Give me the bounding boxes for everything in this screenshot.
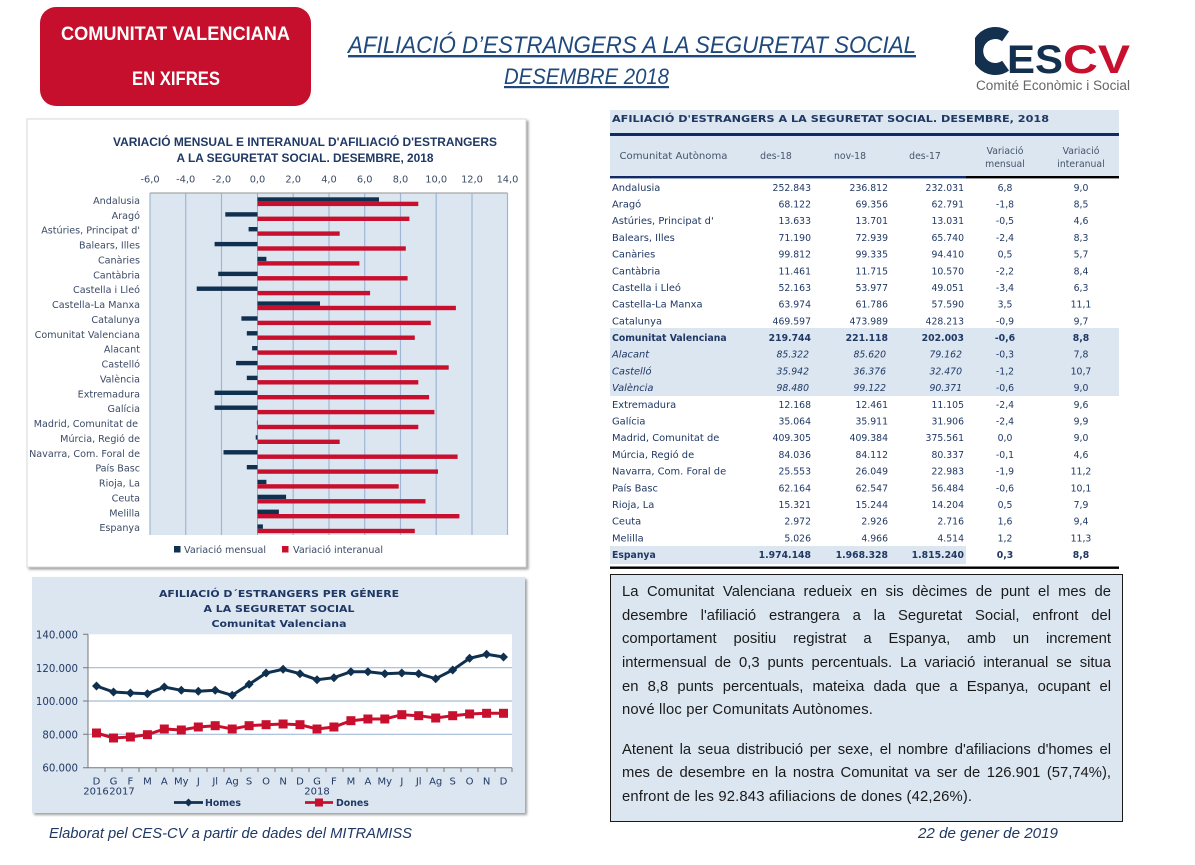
bar chart category labels: Andalusia [93,196,140,207]
table rows: -2,4 [996,400,1014,411]
table rows: 9,6 [1074,400,1088,411]
table rows: 1,6 [998,517,1012,528]
table column headers: Comunitat Autònoma [620,150,728,162]
bar chart category labels: Castella-La Manxa [52,300,140,311]
table rows: 1,2 [998,533,1012,544]
line chart x axis labels: My [174,776,189,788]
table rows: 15.244 [855,500,888,511]
table rows: 35.911 [855,416,888,428]
bar chart x axis labels: 6,0 [357,174,372,186]
table rows: 6,8 [998,183,1012,194]
table rows: 35.064 [778,416,811,428]
table rows: 2.926 [861,517,888,528]
bar chart heading: VARIACIÓ MENSUAL E INTERANUAL D'AFILIACIÓ D'ESTRANGERS [113,134,497,149]
bar chart category labels: Extremadura [78,389,140,400]
table rows: 61.786 [855,300,888,311]
table rows: 8,8 [1073,333,1089,344]
table column headers: Variació [1063,146,1100,157]
line chart x axis labels: F [331,776,337,788]
table rows: -2,2 [996,266,1014,277]
table rows: 11.461 [778,266,811,277]
table rows: -1,2 [996,366,1014,377]
table rows: -0,6 [996,383,1014,394]
line chart x axis labels: Jl [415,776,422,788]
table rows: 26.049 [855,467,888,478]
table rows: 57.590 [931,300,964,311]
bars: variació mensual [197,197,379,529]
table rows: 9,4 [1074,517,1088,528]
bar chart x axis labels: 10,0 [425,174,447,186]
table rows: 99.122 [853,383,886,394]
bar chart x axis labels: 14,0 [497,174,518,186]
table rows: 10,1 [1071,483,1091,494]
table rows: Alacant [611,350,650,361]
bar chart category labels: Alacant [104,345,140,356]
table rows: 11.105 [931,400,964,411]
table rows: 9,9 [1074,416,1088,428]
table rows: 9,7 [1074,316,1088,327]
line chart x axis labels: G [110,776,117,788]
bar chart category labels: Ceuta [112,493,140,504]
table rows: Extremadura [612,400,676,411]
line chart x axis labels: N [279,776,287,788]
table rows: 49.051 [931,283,964,294]
table rows: 68.122 [778,200,811,210]
line chart y axis labels: 140.000 [36,630,78,642]
table rows: 1.968.328 [836,550,888,561]
line chart y axis labels [36,630,78,774]
table rows: Castella i Lleó [612,282,681,294]
table rows: Canàries [612,249,655,261]
table rows: 1.815.240 [912,550,965,561]
table rows: 63.974 [778,300,811,311]
table rows: Catalunya [612,316,662,327]
line chart x axis labels: 2016 [83,786,109,798]
table rows: -1,9 [996,467,1014,478]
badge: Comunitat Valenciana en xifres: EN XIFRES [132,69,220,90]
bar chart category labels: Cantàbria [93,269,140,281]
table rows: 65.740 [931,233,964,244]
bar chart category labels: Castelló [102,359,140,371]
table rows: Múrcia, Regió de [612,449,694,461]
table rows: 90.371 [929,383,962,394]
table title band [610,110,1119,136]
line chart legend: Dones [336,798,369,809]
table rows: -2,4 [996,233,1014,244]
table rows: 84.112 [855,450,888,461]
table rows: 221.118 [846,333,888,344]
table rows: Castella-La Manxa [612,300,703,311]
table rows: 469.597 [773,316,811,327]
bar chart heading [113,134,497,165]
table rows: 11.715 [855,266,888,277]
table rows: 10,7 [1071,366,1091,377]
table rows: 236.812 [850,183,888,194]
table rows: 71.190 [778,233,811,244]
table rows: 35.942 [776,366,809,377]
table rows: 80.337 [931,450,964,461]
logo: CES CV: ES [1007,38,1063,82]
table rows: 62.164 [778,483,811,494]
table rows: 99.812 [778,250,811,261]
table rows: -0,6 [996,483,1014,494]
table rows: 56.484 [931,483,964,494]
table rows: 10.570 [931,266,964,277]
table rows: 0,0 [998,433,1012,444]
bar chart legend: Variació mensual [184,544,266,556]
table rows: 22.983 [931,467,964,478]
table rows: 8,4 [1074,266,1088,277]
bar chart heading: A LA SEGURETAT SOCIAL. DESEMBRE, 2018 [176,151,434,165]
table rows: Espanya [612,550,656,561]
table rows: Comunitat Valenciana [612,333,727,344]
line chart x axis labels: A [364,776,371,788]
bar chart category labels: Melilla [109,508,140,519]
text panel: commentary: nové lloc per Comunitats Autònomes. [622,702,873,718]
table rows: 0,5 [998,500,1012,511]
table rows: 2.972 [784,517,811,528]
table rows: 13.633 [778,216,811,227]
table rows: -1,8 [996,200,1014,210]
panel: data table [610,110,1119,569]
table rows: 94.410 [931,250,964,261]
bar chart category labels: Galícia [108,403,140,415]
line chart x axis labels: S [450,776,456,788]
footer: date: 22 de gener de 2019 [917,825,1059,842]
panel: line chart by gender [32,577,525,813]
table rows: 7,9 [1074,500,1088,511]
table rows: 6,3 [1074,283,1088,294]
line chart x axis labels: Ag [226,776,239,788]
table column headers: Variació [987,146,1024,157]
table rows: 232.031 [926,183,964,194]
table rows: 4.514 [937,533,964,544]
table rows: 11,1 [1071,300,1091,311]
table rows: 12.461 [855,400,888,411]
line chart heading: AFILIACIÓ D´ESTRANGERS PER GÉNERE [159,587,399,600]
text panel: commentary: desembre l'afiliació estrangera a la Seguretat Social, enfront del [622,608,1111,624]
table column headers: nov-18 [834,151,866,162]
table rows: -0,1 [996,450,1014,461]
table rows: 0,5 [998,250,1012,261]
table rows: 69.356 [855,200,888,210]
bar chart category labels: Astúries, Principat d' [41,225,140,237]
table rows: 3,5 [998,300,1012,311]
table rows: Cantàbria [612,265,660,277]
line chart legend: Homes [205,798,241,809]
table rows: Castelló [612,365,652,377]
bar chart plot area [150,193,508,535]
table rows: 62.547 [855,483,888,494]
table rows: 5.026 [784,533,811,544]
bar chart category labels: Aragó [112,210,140,222]
bar chart x axis labels [140,174,518,186]
table rows: 0,3 [997,550,1013,561]
table rows: 85.620 [853,350,886,361]
table rows: 85.322 [776,350,809,361]
bar chart category labels: Navarra, Com. Foral de [29,449,140,460]
table rows: Madrid, Comunitat de [612,433,719,444]
table rows [611,183,1091,561]
line chart x axis labels: M [143,776,152,788]
table rows: Ceuta [612,517,641,528]
bar chart x axis labels: 8,0 [393,174,408,186]
bar chart x axis labels: -6,0 [140,174,160,186]
title: AFILIACIÓ D’ESTRANGERS A LA SEGURETAT SOCIAL [346,32,916,59]
table rows: 252.843 [773,183,811,194]
table rows: Balears, Illes [612,233,675,244]
line chart x axis labels: A [161,776,168,788]
line chart x axis labels: 2017 [109,786,135,798]
text panel: commentary: La Comunitat Valenciana redueix en sis dècimes de punt el mes de [622,584,1111,600]
table rows: -0,5 [996,216,1014,227]
bar chart category labels: Catalunya [91,315,140,326]
text panel: commentary: en 8,8 punts percentuals, mateixa dada que a Espanya, ocupant el [622,679,1111,695]
bar chart category labels [29,196,140,534]
table rows: 98.480 [776,383,809,394]
table rows: Aragó [612,198,641,210]
table rows: 5,7 [1074,250,1088,261]
table rows: 31.906 [931,416,964,428]
table rows: 99.335 [855,250,888,261]
bar chart x axis labels: -4,0 [176,174,195,186]
text panel: commentary: enfront de les 92.843 afiliacions de dones (42,26%). [622,789,972,805]
table rows: 409.384 [850,433,888,444]
table rows: 13.701 [855,216,888,227]
line chart x axis labels: Jl [211,776,218,788]
line chart y axis labels: 120.000 [36,664,78,675]
table highlight bands [610,328,1119,564]
line chart x axis labels: Ag [429,776,442,788]
footer: source note: Elaborat pel CES-CV a partir de dades del MITRAMISS [49,825,412,842]
line chart x axis labels: D [296,776,304,788]
logo: CES CV: Comité Econòmic i Social [976,78,1130,93]
bar chart category labels: Balears, Illes [79,241,140,252]
line chart x axis labels: G [313,776,321,788]
table rows: 15.321 [778,500,811,511]
bar chart x axis labels: 2,0 [285,174,301,186]
line chart heading [159,587,399,630]
table rows: Navarra, Com. Foral de [612,467,726,478]
bar chart category labels: País Basc [95,463,140,475]
table rows: 409.305 [773,433,811,444]
table rows: 428.213 [926,316,964,327]
table rows: 4,6 [1074,216,1088,227]
line chart y axis labels: 60.000 [42,764,78,774]
bar chart x axis labels: 4,0 [321,174,337,186]
table rows: 14.204 [931,500,964,511]
table rows: Andalusia [612,183,660,194]
table rows: 62.791 [931,200,964,210]
table rows: 84.036 [778,450,811,461]
table rows: País Basc [612,482,658,494]
line chart x axis labels [83,776,508,798]
table rows: 9,0 [1074,433,1088,444]
line chart heading: A LA SEGURETAT SOCIAL [204,604,354,615]
bar chart category labels: València [100,373,140,385]
bar chart category labels: Castella i Lleó [73,284,140,296]
bar chart category labels: Comunitat Valenciana [35,330,140,341]
line series: Homes [92,650,508,700]
bar chart x axis labels: 0,0 [250,174,265,186]
table column headers: des-18 [760,151,792,162]
logo: CES CV: CV [1063,38,1130,82]
table rows: -3,4 [996,283,1014,294]
line chart legend [174,798,369,809]
table rows: 79.162 [929,350,962,361]
bar chart category labels: Canàries [98,254,140,266]
table rows: 473.989 [850,316,888,327]
table rows: 25.553 [778,467,811,478]
table rows: 4,6 [1074,450,1088,461]
panel: bar chart of monthly and annual variation [27,119,526,567]
bar chart category labels: Espanya [99,523,140,534]
line chart heading: Comunitat Valenciana [212,619,346,630]
table rows: 8,5 [1074,200,1088,210]
table rows: 36.376 [853,366,886,377]
table rows: -0,3 [996,350,1014,361]
table rows: Galícia [612,416,645,428]
table rows: València [612,382,653,394]
text panel: commentary: intermensual de 0,3 punts percentuals. La variació interanual se situa [622,655,1111,671]
table rows: 9,0 [1074,383,1088,394]
table rows: 1.974.148 [759,550,811,561]
table rows: 32.470 [929,366,962,377]
line chart x axis labels: J [399,776,403,788]
bar chart category labels: Múrcia, Regió de [60,433,140,445]
badge: Comunitat Valenciana en xifres: COMUNITAT VALENCIANA [61,24,290,45]
badge: Comunitat Valenciana en xifres [40,7,311,106]
table rows: -0,9 [996,316,1014,327]
table rows: 8,3 [1074,233,1088,244]
table column headers: interanual [1057,159,1105,170]
line chart x axis labels: O [262,776,270,788]
text panel: commentary: comportament positiu registrat a Espanya, amb un increment [622,631,1111,647]
text panel: commentary: Atenent la seua distribució per sexe, el nombre d'afiliacions d'homes el [622,742,1111,758]
line chart x axis labels: D [93,776,101,788]
table rows: -0,6 [995,333,1015,344]
table column headers: mensual [985,159,1025,170]
text panel: commentary: mes de desembre en la nostra Comunitat va ser de 126.901 (57,74%), [622,765,1111,781]
bar chart x axis labels: -2,0 [212,174,231,186]
bar chart category labels: Madrid, Comunitat de [34,419,138,430]
table rows: 9,0 [1074,183,1088,194]
table rows: -2,4 [996,416,1014,428]
table rows: 7,8 [1074,350,1088,361]
line series: Dones [92,709,508,742]
bar chart category labels: Rioja, La [99,478,140,490]
line chart plot area [83,634,512,772]
line chart x axis labels: J [196,776,200,788]
bar chart x axis labels: 12,0 [461,174,483,186]
title: DESEMBRE 2018 [504,64,670,89]
table rows: 11,3 [1071,533,1091,544]
table rows: 12.168 [778,400,811,411]
table rows: 202.003 [922,333,964,344]
logo: CES CV [976,33,1130,93]
bar chart legend [174,544,383,556]
table rows: Rioja, La [612,500,654,511]
table rows: 4.966 [861,533,888,544]
line chart x axis labels: My [378,776,392,788]
table rows: 72.939 [855,233,888,244]
line chart x axis labels: S [246,776,252,788]
table column headers [610,136,1119,178]
table rows: 8,8 [1073,550,1089,561]
table rows: 11,2 [1071,467,1091,478]
line chart x axis labels: D [500,776,508,788]
line chart y axis labels: 100.000 [36,697,78,708]
line chart x axis labels: N [483,776,490,788]
line chart x axis labels: M [347,776,355,788]
line chart y axis labels: 80.000 [42,730,78,742]
table rows: 53.977 [855,283,888,294]
title [346,32,916,89]
bar chart legend: Variació interanual [293,544,383,556]
table column headers: des-17 [909,151,941,162]
bars: variació interanual [258,202,459,533]
text panel: commentary [610,574,1123,822]
table rows: 219.744 [769,333,812,344]
table rows: Melilla [612,533,644,544]
line chart x axis labels: F [128,776,134,788]
table rows: 52.163 [778,283,811,294]
table rows: 2.716 [937,517,964,528]
table title band: AFILIACIÓ D'ESTRANGERS A LA SEGURETAT SOCIAL. DESEMBRE, 2018 [612,112,1049,125]
table rows: 375.561 [926,433,964,444]
line chart x axis labels: 2018 [304,786,330,798]
table rows: 13.031 [931,216,964,227]
line chart x axis labels: O [466,776,474,788]
table rows: Astúries, Principat d' [612,215,714,227]
